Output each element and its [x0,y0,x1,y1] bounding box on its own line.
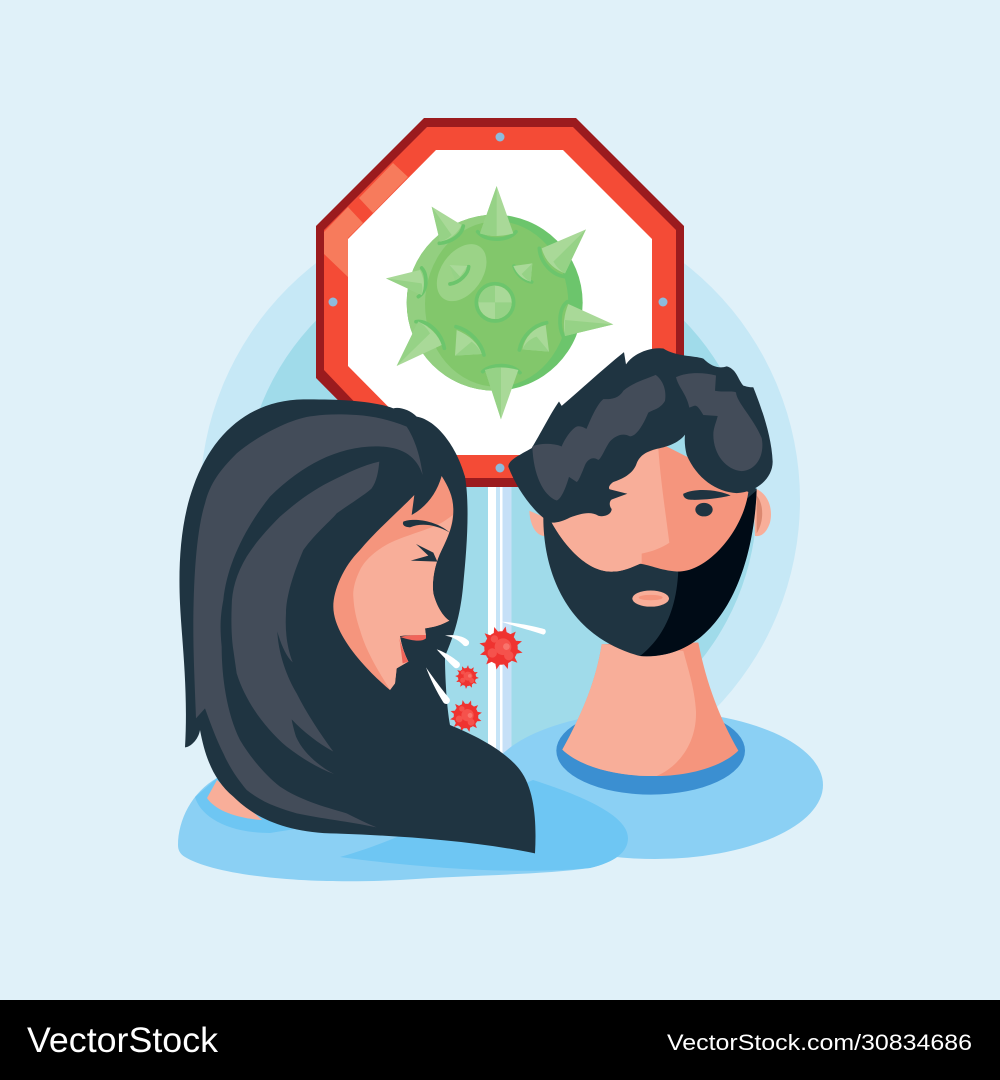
watermark bar [0,1000,1000,1080]
lips [400,635,426,641]
sign white face [348,150,652,455]
signpost pole [488,480,512,755]
cough streaks [426,622,546,704]
ears [529,511,546,536]
hair highlights [532,375,665,501]
icon: green virus [386,186,613,419]
logo text: VectorStock [27,1021,219,1060]
woman [179,399,536,853]
mouth [632,590,669,607]
right eye and eyebrow [695,503,713,516]
face [333,476,453,690]
hair highlights [193,414,423,827]
icon: red virus particles [446,622,527,736]
sign highlight [324,163,408,277]
man's shirt [487,711,823,859]
stop sign [316,118,684,487]
woman's shirt [178,778,628,881]
woman's back skin [207,780,262,820]
face [552,441,748,572]
sign bolts [328,132,668,472]
closed eye [411,544,437,562]
man's hair [508,348,773,523]
beard [543,475,757,656]
man's head [508,348,773,656]
background circles [200,200,800,800]
image id text: VectorStock.com/30834686 [667,1030,972,1055]
man's collar and neck [556,643,745,795]
woman's hair [179,399,536,853]
eyebrow [403,520,450,533]
